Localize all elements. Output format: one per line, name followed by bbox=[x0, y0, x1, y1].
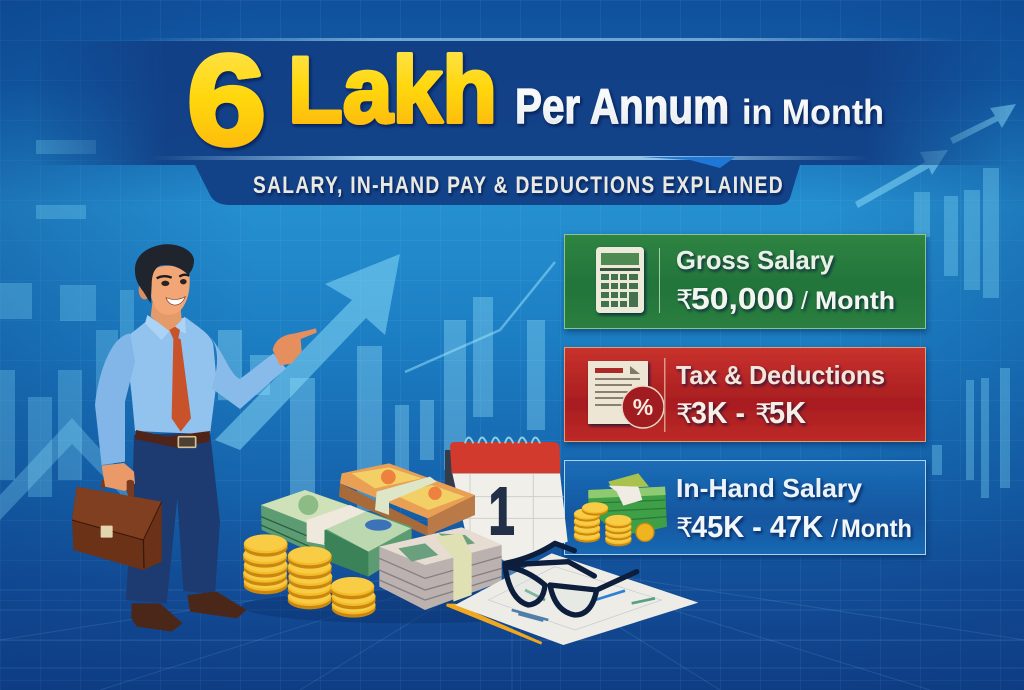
calendar: 1 bbox=[489, 475, 515, 549]
left hand bbox=[102, 463, 135, 491]
orange cash bundle bbox=[339, 463, 475, 536]
6: 6 bbox=[187, 29, 266, 172]
card: tax and deductions bbox=[564, 348, 926, 442]
floor grid bbox=[0, 560, 1024, 690]
gross salary label: Gross Salary bbox=[676, 245, 835, 275]
icon: cash and coins bbox=[574, 473, 667, 546]
chart bars: centre bbox=[218, 297, 545, 523]
title text bbox=[187, 29, 884, 172]
shadow on floor bbox=[242, 590, 575, 623]
Lakh: Lakh bbox=[288, 37, 497, 142]
tax and deductions label: Tax & Deductions bbox=[676, 360, 885, 390]
briefcase bbox=[72, 480, 162, 570]
in Month: in Month bbox=[742, 93, 884, 132]
right hand pointing bbox=[273, 328, 317, 366]
title banner bbox=[30, 29, 1010, 205]
belt bbox=[135, 430, 210, 448]
in-hand salary value: / bbox=[831, 515, 838, 543]
gross salary value: / bbox=[801, 287, 808, 315]
gross salary value: 50,000 bbox=[691, 281, 794, 316]
gross salary value: Month bbox=[815, 287, 895, 315]
card: gross salary bbox=[564, 234, 926, 328]
trousers bbox=[126, 432, 220, 603]
shirt bbox=[95, 315, 286, 465]
tax and deductions value: 5K bbox=[769, 395, 807, 430]
money, calendar and documents bbox=[242, 437, 698, 645]
shoes bbox=[131, 592, 247, 632]
tax and deductions value: ₹ bbox=[676, 399, 693, 429]
tax and deductions value bbox=[676, 395, 807, 430]
gross salary value: ₹ bbox=[676, 285, 693, 315]
icon: tax document: % bbox=[633, 394, 653, 420]
glasses bbox=[505, 543, 637, 615]
tie bbox=[169, 327, 191, 432]
icon: calculator bbox=[596, 247, 644, 313]
coin stacks bbox=[243, 534, 376, 618]
in-hand salary label: In-Hand Salary bbox=[676, 473, 863, 503]
neck bbox=[151, 300, 182, 332]
document with chart bbox=[447, 553, 698, 645]
person bbox=[72, 244, 317, 632]
white cash bundle bbox=[379, 527, 502, 610]
card: in-hand salary bbox=[564, 460, 926, 554]
green cash bundle bbox=[261, 490, 412, 577]
in-hand salary value: Month bbox=[841, 515, 912, 543]
icon: tax document bbox=[588, 361, 664, 428]
tax and deductions value: ₹ bbox=[755, 399, 772, 429]
in-hand salary value: ₹ bbox=[676, 513, 693, 543]
in-hand salary value bbox=[676, 509, 912, 544]
chart bars: left bbox=[0, 140, 134, 497]
gross salary value bbox=[676, 281, 895, 316]
head bbox=[135, 244, 194, 315]
calendar bbox=[445, 437, 568, 562]
in-hand salary value: 45K - 47K bbox=[691, 509, 824, 544]
Per Annum: Per Annum bbox=[515, 80, 729, 134]
tax and deductions value: 3K - bbox=[691, 395, 745, 430]
chart bars: right bbox=[914, 168, 1010, 498]
growth arrows bbox=[0, 104, 1016, 520]
subtitle: SALARY, IN-HAND PAY & DEDUCTIONS EXPLAINED bbox=[253, 171, 783, 199]
